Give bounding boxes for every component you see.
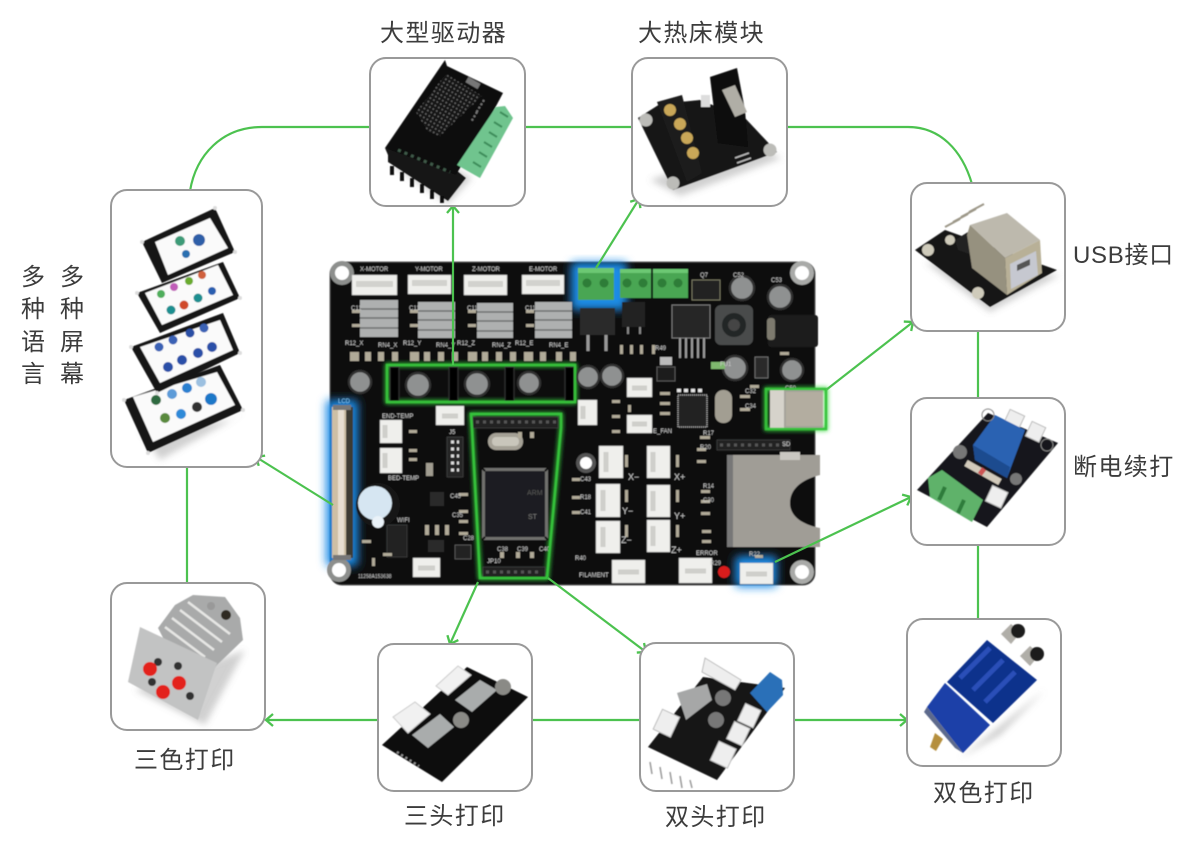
board silk labels: C43 — [580, 477, 592, 483]
label: multi-language (vertical): 语 — [21, 329, 46, 356]
board silk labels: Y− — [622, 506, 633, 516]
label: multi-language (vertical): 言 — [21, 361, 46, 388]
motor connectors — [352, 275, 564, 295]
power transistors and inductor — [580, 280, 818, 358]
board silk labels: Z+ — [671, 545, 682, 555]
board silk labels: R20 — [700, 445, 712, 451]
triple-colour hot end image — [128, 595, 245, 725]
card: dual-colour printing — [907, 619, 1061, 766]
board silk labels: Z− — [621, 535, 632, 545]
SMD parts — [350, 310, 789, 566]
board silk labels: Q7 — [700, 273, 709, 279]
board silk labels: RN4_Y — [436, 343, 455, 349]
white JST connectors — [380, 378, 773, 584]
serial IC and crystal — [426, 357, 768, 559]
board silk labels: X− — [628, 472, 639, 482]
motor labels: E-MOTOR — [529, 267, 558, 273]
board silk labels: RN4_E — [549, 343, 568, 349]
label: multi-screen (vertical): 屏 — [60, 329, 85, 356]
board silk labels: X+ — [674, 472, 685, 482]
label: multi-screen (vertical): 幕 — [60, 361, 85, 388]
board silk labels: E_FAN — [653, 429, 672, 435]
label: triple-head printing: 三头打印 — [404, 803, 506, 830]
board silk labels: R22 — [749, 552, 761, 558]
board silk labels: C35 — [452, 513, 464, 519]
pin headers — [387, 367, 790, 578]
board silk labels: SD — [782, 442, 791, 448]
card: triple-colour printing — [111, 583, 265, 730]
card: dual-head printing — [640, 643, 794, 791]
label: large driver: 大型驱动器 — [380, 20, 507, 47]
board silk labels: C11 — [525, 306, 536, 312]
board silk labels: R29 — [710, 561, 722, 567]
motor driver heat sinks — [360, 300, 572, 338]
board silk labels: C52 — [733, 273, 745, 279]
board silk labels: C39 — [517, 547, 529, 553]
green highlight frames — [387, 365, 826, 578]
board silk labels: R12_X — [345, 341, 363, 347]
stacked touchscreens image — [122, 206, 246, 460]
board silk labels: C11 — [467, 306, 478, 312]
board silk labels: JP10 — [487, 559, 501, 565]
board silk labels — [338, 273, 797, 580]
board silk labels: 11258A153638 — [358, 574, 392, 580]
electrolytic capacitors — [349, 276, 803, 397]
board silk labels: ERROR — [696, 551, 718, 557]
USB port — [770, 390, 823, 428]
board silk labels: RN4_X — [378, 343, 397, 349]
SD card slot — [727, 452, 820, 547]
board silk labels: R40 — [575, 556, 587, 562]
board silk labels: C34 — [745, 404, 757, 410]
label: multi-screen (vertical) — [60, 264, 85, 388]
LCD flex connector — [332, 405, 353, 560]
buzzer — [356, 483, 400, 528]
label: heated bed module: 大热床模块 — [638, 20, 765, 47]
heated bed MOSFET module image — [638, 68, 782, 196]
label: triple-colour printing: 三色打印 — [134, 747, 236, 774]
card: multi-language screens — [111, 190, 262, 467]
arrows — [256, 199, 913, 720]
motor labels: X-MOTOR — [360, 267, 389, 273]
board silk labels: C45 — [450, 494, 462, 500]
motor labels: Y-MOTOR — [415, 267, 443, 273]
label: power-loss resume: 断电续打 — [1073, 454, 1175, 481]
label: dual-colour printing: 双色打印 — [933, 780, 1035, 807]
label: multi-screen (vertical): 种 — [60, 296, 85, 323]
board silk labels: R49 — [655, 346, 667, 352]
dual-head extension board image — [648, 658, 785, 788]
board silk labels: R12_E — [515, 341, 533, 347]
board silk labels: LCD — [338, 399, 351, 405]
board silk labels: END-TEMP — [382, 414, 413, 420]
screen icons — [151, 234, 217, 423]
triple-head extension board image — [382, 666, 528, 782]
label: multi-language (vertical) — [21, 264, 46, 388]
board silk labels: C11 — [409, 306, 420, 312]
board silk labels: R17 — [703, 431, 715, 437]
board silk labels: C32 — [745, 389, 757, 395]
board silk labels: FU1 — [720, 362, 732, 368]
card: triple-head printing — [378, 644, 532, 791]
card: heated bed module — [632, 58, 787, 206]
board silk labels: C50 — [785, 386, 797, 392]
board silk labels: RN4_Z — [492, 343, 511, 349]
label: multi-language (vertical): 多 — [21, 264, 46, 291]
board silk labels: R12_Z — [457, 341, 475, 347]
board silk labels: C11 — [351, 306, 362, 312]
screen corner screws — [122, 206, 245, 455]
main board — [326, 261, 826, 587]
board silk labels: C41 — [580, 510, 592, 516]
board silk labels: C30 — [703, 498, 715, 504]
blue highlight glows — [326, 262, 777, 587]
relay module image — [917, 409, 1058, 527]
board silk labels: FILAMENT — [579, 573, 609, 579]
dual-colour hot end image — [924, 624, 1045, 758]
board silk labels: R18 — [580, 495, 592, 501]
board silk labels: C40 — [539, 547, 551, 553]
label: dual-head printing: 双头打印 — [665, 804, 767, 831]
board silk labels: R12_Y — [403, 341, 421, 347]
green highlight glows — [387, 365, 826, 578]
board silk labels: C38 — [497, 547, 509, 553]
connector lines — [187, 127, 978, 720]
board silk labels: WIFI — [397, 518, 410, 524]
label: multi-screen (vertical): 多 — [60, 264, 85, 291]
label: USB port: USB接口 — [1073, 242, 1174, 269]
card: power-loss resume — [911, 398, 1065, 545]
MCU and crystal — [482, 433, 548, 540]
motor labels — [360, 267, 558, 273]
mounting holes — [327, 261, 814, 584]
red LED — [718, 566, 730, 578]
driver module image — [385, 60, 513, 204]
board silk labels: C28 — [463, 536, 475, 542]
motor labels: Z-MOTOR — [472, 267, 501, 273]
green screw terminals — [578, 268, 688, 300]
board silk labels: R14 — [703, 484, 715, 490]
MCU and crystal: ARM — [527, 490, 543, 497]
USB module image — [915, 204, 1060, 312]
card: USB port — [911, 183, 1065, 331]
board silk labels: J5 — [449, 430, 456, 436]
card: large driver — [370, 58, 525, 206]
label: multi-language (vertical): 种 — [21, 296, 46, 323]
board silk labels: BED-TEMP — [388, 476, 419, 482]
board silk labels: Y+ — [674, 511, 685, 521]
MCU and crystal: ST — [528, 514, 538, 521]
board silk labels: C53 — [771, 278, 783, 284]
